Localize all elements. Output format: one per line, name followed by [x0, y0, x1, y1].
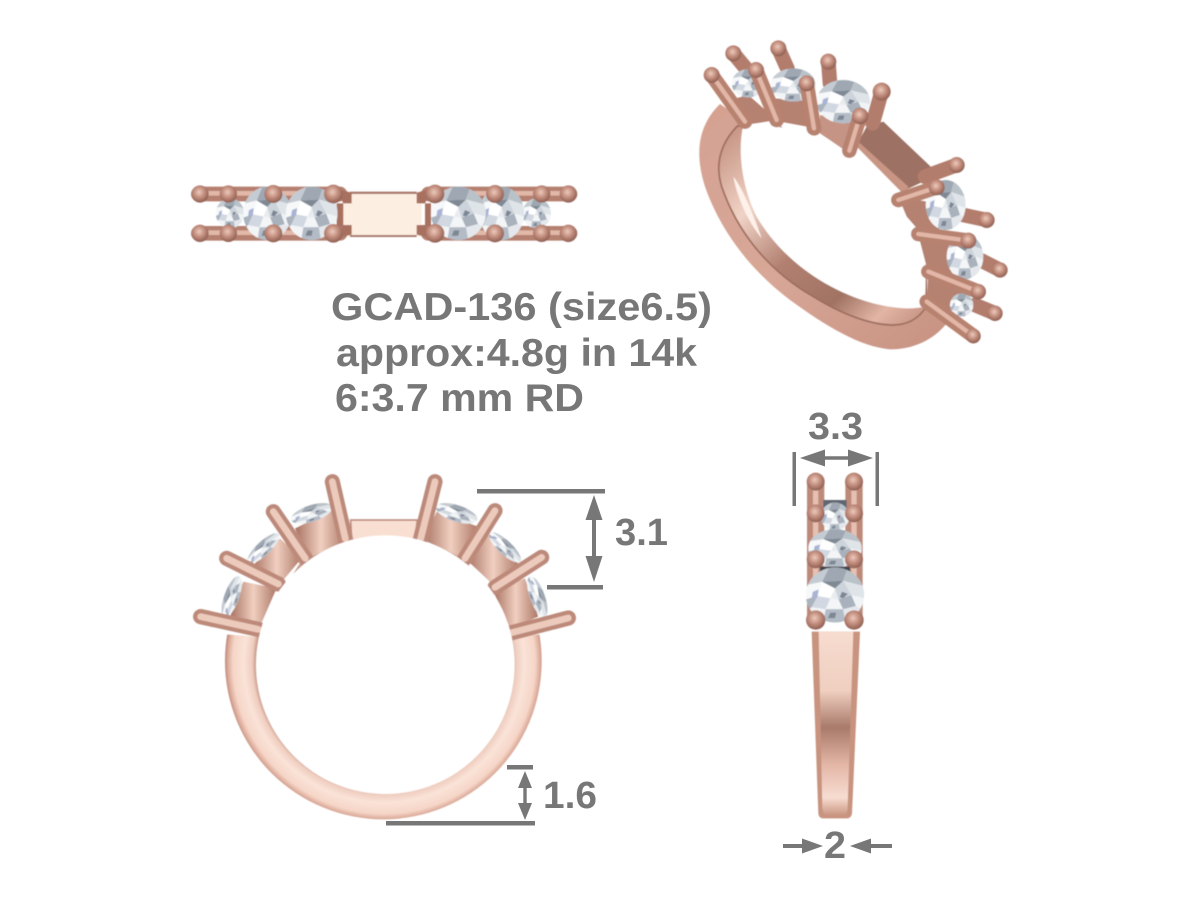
stone seats — [230, 510, 538, 628]
prongs — [201, 482, 568, 633]
wall highlight — [733, 177, 762, 238]
double arrow — [586, 495, 602, 582]
product specification text — [331, 286, 712, 420]
dimension 3.3 — [792, 406, 879, 506]
top region mask above shoulders — [213, 460, 553, 637]
diamonds — [806, 500, 864, 622]
dimension 2: 2 — [824, 825, 846, 867]
prong columns — [816, 482, 854, 620]
ring opening — [256, 535, 515, 794]
dimension 1.6: 1.6 — [543, 775, 597, 817]
stone seats — [723, 95, 963, 317]
center plate — [351, 520, 417, 540]
column highlights — [816, 482, 854, 620]
diamonds — [732, 68, 983, 317]
dimension 2 — [783, 825, 892, 867]
prong heads — [191, 185, 577, 243]
plate shoulders — [327, 187, 440, 241]
tapered shank — [812, 632, 860, 818]
shank — [225, 503, 542, 819]
prong rails — [198, 194, 570, 233]
band outer body — [699, 104, 947, 349]
dimension 3.1 — [477, 489, 668, 590]
center plate — [343, 192, 422, 237]
ring opening — [741, 124, 927, 308]
back prongs — [733, 48, 1000, 313]
double arrow — [800, 450, 873, 466]
dimension 1.6 — [386, 765, 597, 826]
prong heads — [806, 473, 864, 630]
product specification text: 6:3.7 mm RD — [335, 377, 584, 420]
product specification text: approx:4.8g in 14k — [336, 332, 697, 375]
dimension 3.3: 3.3 — [808, 406, 863, 448]
prong highlights — [201, 482, 568, 633]
product specification text: GCAD-136 (size6.5) — [331, 286, 712, 329]
prong heads — [704, 40, 1008, 343]
side view of ring — [806, 473, 864, 818]
dimension 3.1: 3.1 — [615, 512, 668, 554]
diamonds — [217, 499, 552, 620]
front prong highlights — [712, 70, 978, 336]
left arrow — [783, 838, 823, 854]
three-quarter perspective view of ring — [699, 40, 1008, 349]
diamonds — [216, 187, 551, 240]
top view of ring — [191, 185, 577, 243]
band inner wall — [719, 126, 927, 325]
front view of ring — [201, 460, 568, 819]
right arrow — [850, 838, 892, 854]
front prongs — [712, 70, 978, 336]
double arrow — [518, 771, 532, 820]
rail highlights — [198, 193, 570, 233]
center plate — [855, 122, 931, 194]
